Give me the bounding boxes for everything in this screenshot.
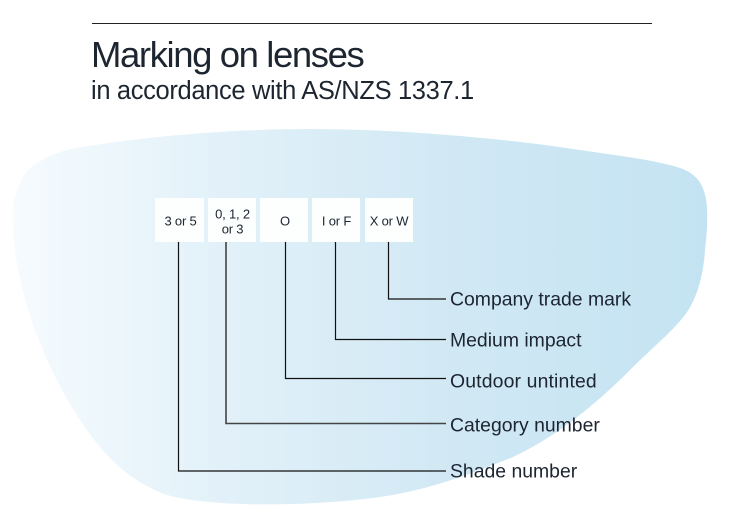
label: company trade mark: Company trade mark	[450, 288, 631, 310]
box: category: or 3	[222, 222, 243, 236]
box: trade mark: X or W	[370, 214, 409, 228]
box: shade: 3 or 5	[164, 214, 197, 228]
top rule	[92, 23, 652, 24]
title: Marking on lenses	[91, 34, 364, 75]
leader line: company trade mark	[388, 242, 446, 299]
lens shape	[13, 129, 707, 504]
leader line: medium impact	[336, 242, 446, 340]
subtitle: in accordance with AS/NZS 1337.1	[91, 77, 474, 105]
label: category number: Category number	[450, 414, 600, 436]
label: outdoor untinted: Outdoor untinted	[450, 370, 597, 392]
box: category: 0, 1, 2	[215, 206, 250, 222]
label: shade number: Shade number	[450, 460, 578, 482]
box: outdoor	[260, 198, 308, 242]
marking boxes	[155, 198, 413, 242]
box: shade	[155, 198, 204, 242]
leader line: shade number	[178, 242, 446, 471]
label: medium impact: Medium impact	[450, 330, 582, 352]
box: category	[208, 198, 256, 242]
box: impact	[312, 198, 360, 242]
box: outdoor: O	[280, 214, 290, 228]
leader line: outdoor untinted	[286, 242, 446, 378]
box: trade mark	[365, 198, 413, 242]
leader line: category number	[226, 242, 446, 424]
box: impact: I or F	[322, 214, 351, 228]
